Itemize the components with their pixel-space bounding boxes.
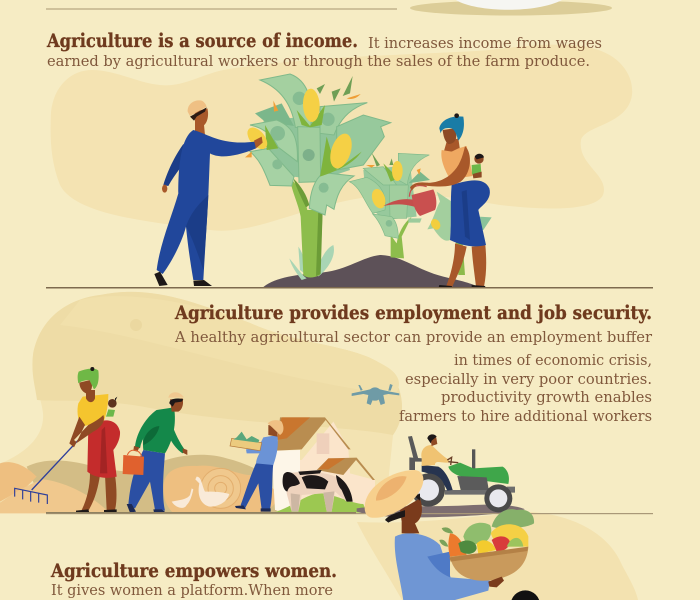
text: income line two: earned by agricultural workers or through the sales of the farm produce.: [47, 52, 590, 70]
third small plant: [427, 192, 492, 275]
woman with vegetable basket: [365, 470, 540, 600]
divider: income section base: [46, 287, 653, 288]
text: employment paragraph: productivity growth enables: [441, 388, 652, 406]
geese: [172, 477, 229, 508]
drone: [352, 384, 399, 405]
divider: employment section base: [46, 513, 653, 514]
heading: income: Agriculture is a source of income.: [46, 30, 358, 52]
hills: [27, 455, 280, 513]
text: employment paragraph: in times of economic crisis,: [454, 351, 652, 369]
large money tree: [244, 74, 391, 280]
vegetables: [439, 509, 534, 557]
cow: [283, 470, 353, 512]
dark head below: [511, 590, 540, 600]
top plate shadow and plate: [410, 0, 612, 16]
rake: [15, 428, 89, 504]
man with bucket: [123, 392, 187, 513]
soil mound: [262, 255, 480, 288]
text: income intro: It increases income from wages: [368, 34, 602, 52]
body: [395, 533, 490, 600]
heading: employment: Agriculture provides employment and job security.: [174, 302, 652, 324]
small money tree: [349, 153, 430, 258]
basket rim: [449, 547, 528, 562]
hat: [365, 470, 423, 518]
text: employment paragraph: especially in very poor countries.: [405, 370, 652, 388]
text: women paragraph: It gives women a platform.When more: [51, 581, 333, 599]
grass: [273, 493, 367, 513]
text: employment paragraph: [174, 328, 653, 425]
illustration: farm scene: [0, 367, 375, 513]
woman with baby: [410, 113, 490, 288]
background blob: income section: [51, 45, 632, 231]
hand: [488, 577, 504, 587]
ground shadow: [46, 512, 356, 514]
illustration: money corn scene: [154, 74, 492, 288]
head: [400, 498, 422, 533]
text: employment paragraph: A healthy agricultural sector can provide an employment buffer: [174, 328, 653, 346]
basket: [450, 547, 528, 581]
background blob: employment section: [0, 292, 402, 513]
heading: women: Agriculture empowers women.: [50, 560, 337, 582]
top rule: [46, 8, 397, 10]
tractor: [357, 434, 525, 517]
text: employment paragraph: farmers to hire additional workers: [399, 407, 652, 425]
farmer with crate: [230, 420, 283, 512]
hay bales and rolls: [0, 462, 280, 513]
road: [357, 505, 525, 517]
background blob: women section: [357, 512, 638, 600]
house: [272, 417, 375, 512]
woman with rake: [69, 367, 120, 513]
man in blue: [154, 100, 263, 286]
watering can: [383, 185, 436, 216]
